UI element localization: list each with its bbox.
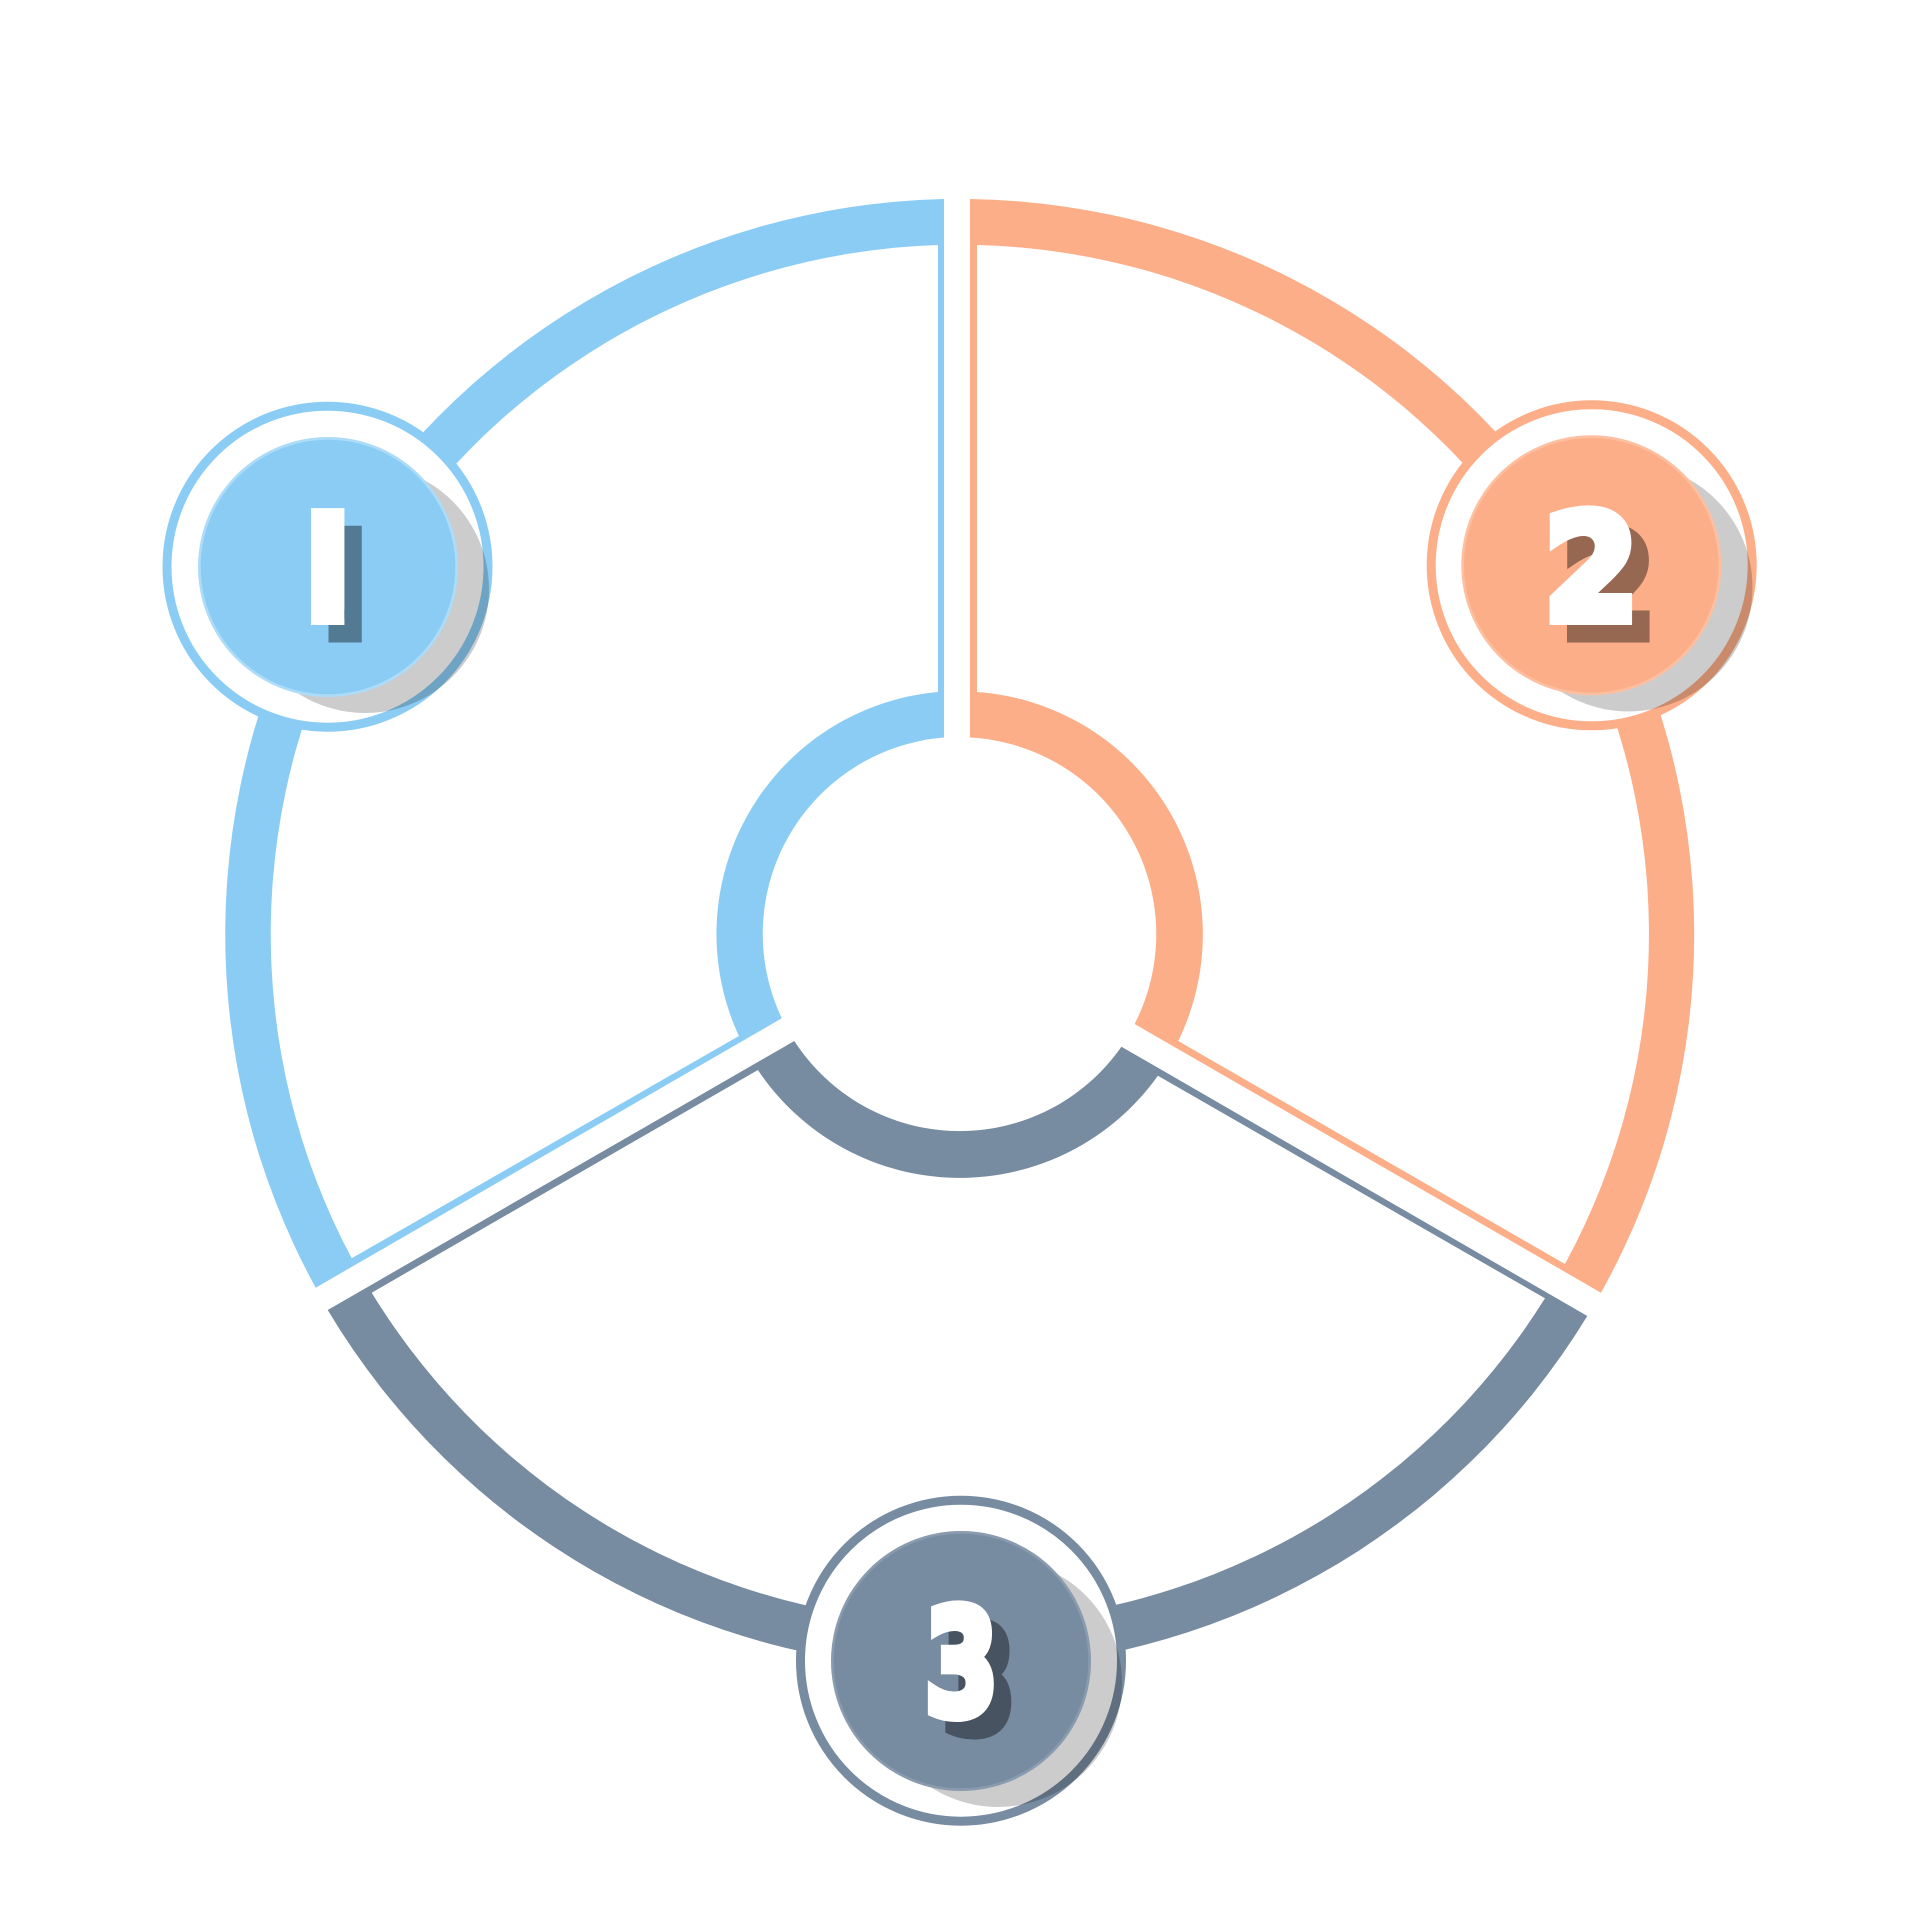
numeral 1 shadow: 1 — [287, 490, 402, 682]
numeral 2 shadow: 2 — [1562, 503, 1656, 672]
badge 1 ring — [167, 406, 488, 727]
badge 1 disc — [198, 437, 458, 697]
badge 2 — [1431, 405, 1752, 726]
badge 3 — [800, 1500, 1122, 1821]
segment: orange arc sector — [970, 199, 1694, 1293]
badge 2 disc — [1461, 435, 1721, 695]
badge 3 ring — [800, 1500, 1122, 1821]
badge 3 disc — [831, 1531, 1091, 1791]
numeral 3 shadow: 3 — [943, 1597, 1015, 1766]
badge 1 shadow — [241, 465, 489, 713]
badge 3 shadow — [874, 1559, 1122, 1807]
numeral 1: 1 — [270, 472, 384, 664]
badge 2 shadow — [1504, 464, 1752, 712]
numeral 3: 3 — [925, 1580, 998, 1748]
segment: blue arc sector — [225, 199, 944, 1288]
segment: slate arc sector — [328, 1041, 1587, 1669]
badge 1 — [167, 406, 489, 727]
numeral 2: 2 — [1544, 485, 1638, 654]
badge 2 ring — [1431, 405, 1752, 726]
